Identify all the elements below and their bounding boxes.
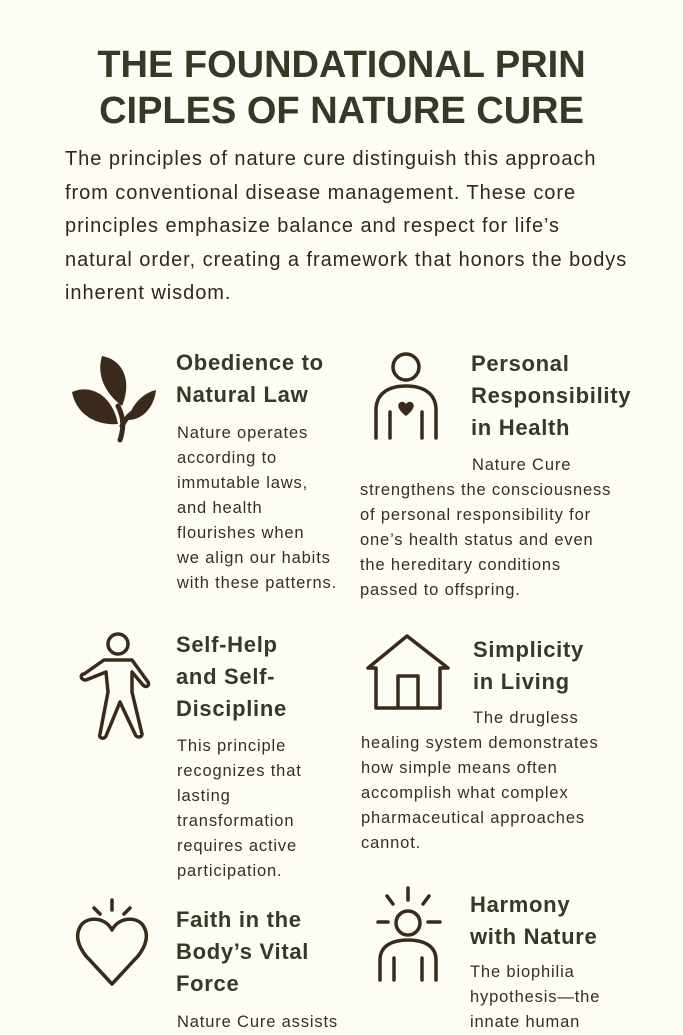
- heading: obedience: [176, 350, 324, 407]
- text: simplicity: healing system demonstrates: [361, 734, 599, 752]
- text: self-help: recognizes that: [177, 762, 302, 780]
- text: harmony: hypothesis—the: [470, 988, 600, 1006]
- heading: faith: Force: [176, 971, 239, 996]
- heading: faith: [176, 907, 309, 996]
- text: obedience: with these patterns.: [177, 574, 337, 592]
- intro text: natural order, creating a framework that honors the bodys: [65, 248, 627, 270]
- text: self-help: transformation: [177, 812, 294, 830]
- intro text: inherent wisdom.: [65, 282, 231, 304]
- heading: harmony: with Nature: [470, 924, 598, 949]
- text: responsibility: the hereditary conditions: [360, 556, 561, 574]
- text: self-help: lasting: [177, 787, 231, 805]
- intro text: principles emphasize balance and respect for life’s: [65, 215, 560, 237]
- text: harmony: [470, 963, 600, 1031]
- heading: self-help: and Self-: [176, 664, 275, 689]
- text: self-help: [177, 737, 302, 880]
- text: simplicity: The drugless: [473, 709, 579, 727]
- heading: responsibility: Responsibility: [471, 383, 631, 408]
- text: responsibility: one’s health status and even: [360, 531, 594, 549]
- text: responsibility: of personal responsibility for: [360, 506, 591, 524]
- text: obedience: flourishes when: [177, 524, 304, 542]
- text: self-help: This principle: [177, 737, 286, 755]
- text: responsibility: Nature Cure: [472, 456, 571, 474]
- heading: harmony: [470, 892, 598, 949]
- text: obedience: [177, 424, 337, 592]
- text: responsibility: strengthens the consciousness: [360, 481, 611, 499]
- title: [97, 44, 586, 132]
- heading: harmony: Harmony: [470, 892, 570, 917]
- text: simplicity: pharmaceutical approaches: [361, 809, 585, 827]
- heading: responsibility: [471, 351, 631, 440]
- text: responsibility: [360, 456, 611, 599]
- icon: house: [366, 634, 450, 710]
- icon: leaves: [72, 356, 156, 442]
- heading: obedience: Natural Law: [176, 382, 308, 407]
- heading: simplicity: Simplicity: [473, 637, 584, 662]
- heading: self-help: Discipline: [176, 696, 287, 721]
- icon: person with heart: [374, 352, 438, 440]
- heading: self-help: [176, 632, 287, 721]
- text: simplicity: accomplish what complex: [361, 784, 569, 802]
- text: simplicity: [361, 709, 599, 852]
- title: THE FOUNDATIONAL PRIN: [97, 44, 586, 86]
- title: CIPLES OF NATURE CURE: [99, 90, 584, 132]
- heading: faith: Faith in the: [176, 907, 302, 932]
- text: obedience: we align our habits: [177, 549, 331, 567]
- text: self-help: requires active: [177, 837, 297, 855]
- intro text: from conventional disease management. These core: [65, 182, 576, 204]
- text: harmony: innate human: [470, 1013, 580, 1031]
- icon: heart with rays: [76, 898, 148, 986]
- text: obedience: according to: [177, 449, 277, 467]
- text: responsibility: passed to offspring.: [360, 581, 521, 599]
- heading: simplicity: in Living: [473, 669, 570, 694]
- icon: walking figure: [79, 632, 150, 740]
- intro text: The principles of nature cure distinguish this approach: [65, 148, 596, 170]
- text: simplicity: how simple means often: [361, 759, 558, 777]
- heading: obedience: Obedience to: [176, 350, 324, 375]
- heading: simplicity: [473, 637, 584, 694]
- text: obedience: and health: [177, 499, 263, 517]
- text: obedience: immutable laws,: [177, 474, 308, 492]
- text: faith: Nature Cure assists: [177, 1013, 338, 1031]
- heading: faith: Body’s Vital: [176, 939, 309, 964]
- heading: responsibility: in Health: [471, 415, 570, 440]
- text: obedience: Nature operates: [177, 424, 308, 442]
- text: self-help: participation.: [177, 862, 282, 880]
- intro text: [65, 148, 627, 304]
- heading: self-help: Self-Help: [176, 632, 278, 657]
- icon: person with sun rays: [376, 886, 442, 982]
- text: simplicity: cannot.: [361, 834, 421, 852]
- text: harmony: The biophilia: [470, 963, 575, 981]
- heading: responsibility: Personal: [471, 351, 570, 376]
